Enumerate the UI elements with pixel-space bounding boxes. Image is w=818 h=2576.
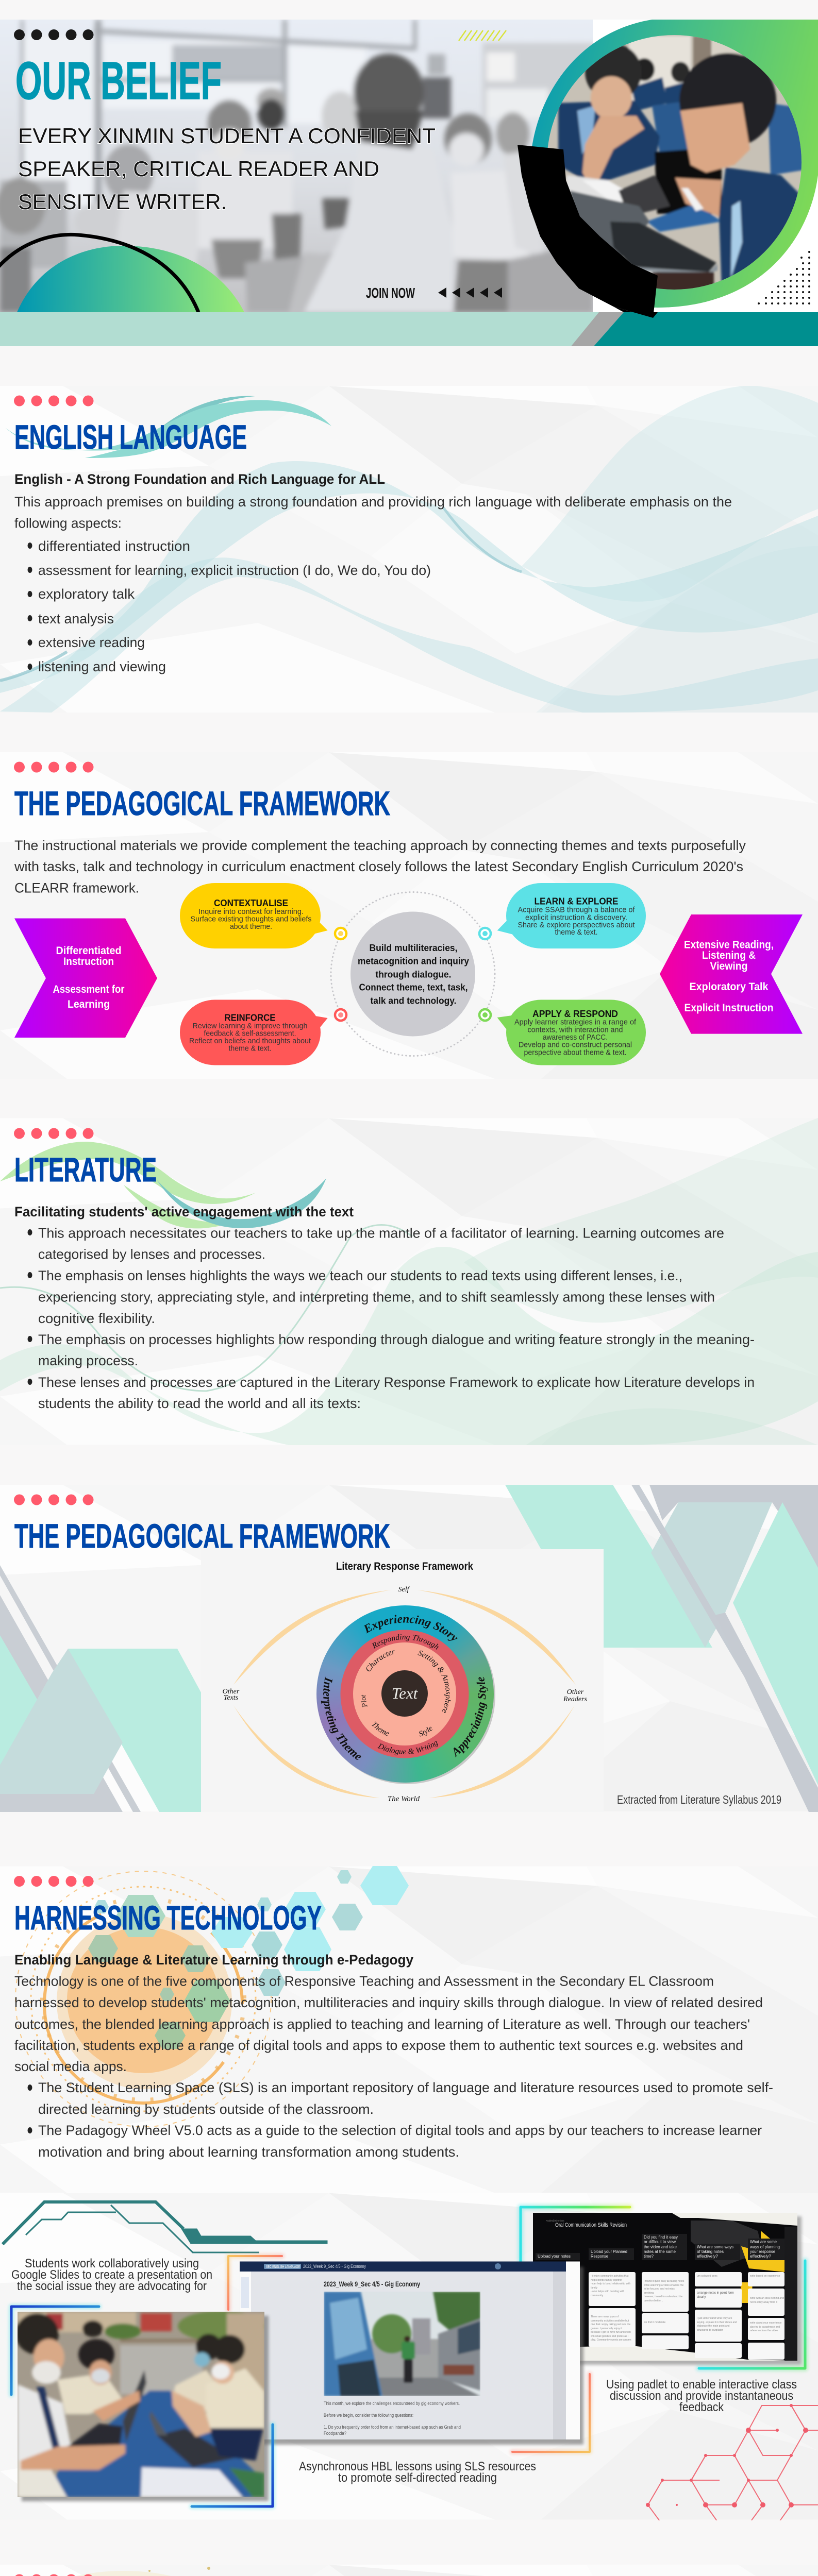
bubble: reinforce: REINFORCE [225,1012,275,1023]
left chevron [14,918,157,1038]
inner labels: Plot [361,1695,368,1707]
padlet column headers [536,2234,784,2260]
process ring [340,1630,469,1758]
belief statement: SPEAKER, CRITICAL READER AND [18,157,379,181]
caption: google slides: the social issue they are advocating for [17,2279,207,2293]
aspects bullet list: text analysis [38,611,114,626]
intro text: social media apps. [14,2059,127,2074]
padlet card text: also try to paraphrase and [750,2326,780,2329]
inner labels: Character [366,1650,395,1671]
bubble: apply and respond: contexts, with interaction and [528,1026,623,1034]
literature bullet list: categorised by lenses and processes. [38,1247,265,1262]
intro text: with tasks, talk and technology in curriculum enactment closely follows the latest Secondary English Curriculum 2020's [14,859,743,874]
green wave ribbons [0,1118,818,1445]
caption: sls [299,2460,536,2485]
padlet column headers: What are some [750,2240,777,2244]
teal swoosh [5,396,331,458]
screenshot: sls lesson [240,2262,583,2445]
padlet card text: There are many types of [591,2315,619,2318]
padlet card text [591,2275,784,2342]
literature bullet list: The emphasis on processes highlights how responding through dialogue and writing feature strongly in the meaning- [38,1332,755,1347]
padlet card text: um coloured pens [697,2275,717,2278]
technology bullet list [28,2080,773,2160]
padlet board title: Oral Communication Skills Revision [555,2222,627,2228]
padlet card text: write about your experience [750,2321,782,2325]
bubble: reinforce: feedback & self-assessment. [204,1029,296,1038]
aspects bullet list [28,538,431,674]
intro text [14,838,746,895]
inner labels: Theme [372,1721,389,1736]
padlet column headers: the video and take [644,2245,677,2249]
padlet card text: helps bonds family together [591,2279,622,2282]
intro text: outcomes, the blended learning approach is applied to teaching and learning of Literature as well. Through our teachers' [14,2016,750,2032]
literature bullet list: making process. [38,1353,138,1368]
caption: sls: Asynchronous HBL lessons using SLS resources [299,2460,536,2473]
panel background [0,1118,818,1445]
caption: google slides: Google Slides to create a presentation on [11,2268,212,2282]
inner labels [360,1647,453,1739]
red dots [14,1494,94,1505]
sls header text: 2023_Week 9_Sec 4/5 - Gig Economy [303,2264,366,2269]
bubble: contextualise [180,883,328,948]
bubble: apply and respond: Apply learner strategies in a range of [514,1019,637,1027]
padlet column headers: or difficult to view [644,2240,676,2244]
padlet card text: while watching a video enables me [644,2284,683,2287]
padlet card text: arrange notes in point form [697,2292,734,2295]
padlet column headers: of taking notes [697,2249,724,2254]
subheading: English - A Strong Foundation and Rich Language for ALL [14,471,385,487]
centre circle [350,912,475,1037]
eye labels: Other [223,1688,240,1696]
sls lesson text [324,2401,461,2436]
centre: text: Text [392,1684,419,1702]
bubble: learn and explore: LEARN & EXPLORE [534,896,619,906]
padlet card text: I found it quite easy as taking notes [644,2280,685,2283]
padlet card text: however, i need to understand the [644,2295,683,2298]
padlet card text: - also helps with bonding with [591,2290,625,2293]
neon frame: padlet [521,2207,805,2368]
photo: students collaborating [15,2311,269,2501]
panel: harnessing technology [0,1866,818,2524]
padlet card text: family [591,2286,598,2290]
caption: padlet: discussion and provide instantaneous [610,2389,793,2403]
hero black dots [14,29,94,40]
technology bullet list: motivation and bring about learning transformation among students. [38,2144,459,2160]
intro text: The instructional materials we provide complement the teaching approach by connecting themes and texts purposefully [14,838,746,853]
panel: literature [0,1118,818,1445]
white area behind ring [593,20,818,312]
process labels [372,1634,439,1755]
centre circle: talk and technology. [370,995,457,1006]
bubble: reinforce: theme & text. [229,1044,271,1053]
intro text: CLEARR framework. [14,880,139,895]
decorative hexagons [88,1866,409,2049]
left chevron: Learning [68,998,110,1010]
literature bullet list: These lenses and processes are captured in the Literary Response Framework to explicate how Literature develops in [38,1375,755,1390]
sls lesson text: 1. Do you frequently order food from an internet-based app such as Grab and [324,2425,461,2430]
right chevron: Extensive Reading, [684,939,774,951]
hero bottom band [0,307,818,346]
subheading: Facilitating students' active engagement with the text [14,1204,354,1219]
red dots [14,396,94,406]
bubble: apply and respond [497,999,646,1065]
padlet column headers: effectively? [697,2254,719,2259]
padlet column headers: Response [591,2254,609,2259]
padlet card text: - can help to bond relationship with [591,2282,630,2285]
neon frame: students photo [11,2307,273,2506]
bubble: contextualise: about theme. [230,923,272,931]
sls lesson photo [324,2292,480,2396]
lens labels: Appreciating Style [454,1676,489,1757]
lens labels: Interpreting Theme [321,1676,361,1760]
bubble: reinforce [180,999,328,1065]
padlet card text: structured to invigilator [697,2329,723,2332]
padlet column headers: effectively? [750,2254,772,2259]
literature bullet list: cognitive flexibility. [38,1311,155,1326]
literature bullet list: experiencing story, appreciating style, and interpreting theme, and to shift seamlessly among these lenses with [38,1290,715,1305]
panel background [0,752,818,1079]
intro text: Technology is one of the five components of Responsive Teaching and Assessment in the Secondary EL Classroom [14,1973,714,1989]
right chevron: Viewing [710,960,747,972]
panel: the pedagogical framework (literature) [0,1485,818,1812]
bubble: learn and explore: theme & text. [555,928,598,937]
intro text: following aspects: [14,515,122,531]
caption: padlet: feedback [679,2400,724,2414]
connector rings [335,928,491,1021]
padlet card text: community [591,2294,604,2297]
centre: text [381,1670,428,1717]
outer lens ring [316,1605,494,1783]
padlet card text: because i get to have fun and even [591,2331,631,2334]
bubble: learn and explore [497,883,646,948]
padlet card text: to be focused and not miss [644,2287,675,2291]
panel background [0,1866,818,2519]
eye labels: Self [398,1586,410,1594]
technology bullet list: directed learning by students outside of the classroom. [38,2102,374,2117]
diagram backing [201,1549,604,1812]
intro text [14,1973,763,2074]
red dots [14,2574,94,2576]
hero black swoosh [517,145,658,318]
panel: our belief hero [0,20,818,346]
panel: talent development [15,2567,210,2576]
intro text: This approach premises on building a strong foundation and providing rich language with deliberate emphasis on the [14,494,732,510]
panel background [0,1485,818,1811]
caption: google slides: Students work collaboratively using [25,2257,199,2270]
inner labels: Setting & Atmosphere [418,1651,451,1713]
diagram: literary response framework [223,1549,604,1803]
literature bullet list: This approach necessitates our teachers to take up the mantle of a facilitator of learning. Learning outcomes are [38,1226,724,1241]
eye outline [233,1590,576,1798]
bubble: learn and explore: Acquire SSAB through a balance of [517,906,635,914]
technology bullet list: The Student Learning Space (SLS) is an important repository of language and literature resources used to promote self- [38,2080,773,2095]
caption: padlet: Using padlet to enable interactive class [606,2378,797,2392]
left chevron: Assessment for [53,984,125,995]
padlet column headers: time? [644,2254,654,2259]
subheading: Enabling Language & Literature Learning through e-Pedagogy [14,1952,413,1968]
process labels: Dialogue & Writing [377,1741,438,1755]
left chevron: Instruction [63,956,114,968]
padlet card text: clearly [697,2296,706,2299]
sls lesson title: 2023_Week 9_Sec 4/5 - Gig Economy [324,2280,420,2288]
belief statement: EVERY XINMIN STUDENT A CONFIDENT [18,124,436,148]
padlet card text: anything. [644,2292,654,2295]
right chevron [660,914,803,1034]
padlet card text: write with an idea in mind and [750,2297,784,2300]
literature bullet list [28,1226,755,1411]
bubble: reinforce: Reflect on beliefs and thoughts about [189,1037,311,1045]
sls lesson text: Foodpanda? [324,2431,346,2436]
eye labels: The World [388,1795,420,1803]
literature bullet list: The emphasis on lenses highlights the ways we teach our students to read texts using different lenses, i.e., [38,1268,682,1283]
hero circular student photo [544,31,807,294]
decorative orange radial rings [15,1871,271,2127]
padlet column headers: your response [750,2249,776,2254]
salmon ring [353,1642,456,1745]
sls header text: SEC ENGLISH LANGUAGE [266,2265,300,2269]
padlet card text: we find it moderate [644,2321,665,2324]
padlet column headers: Upload your notes [538,2254,571,2259]
bubble: reinforce: Review learning & improve through [193,1022,307,1030]
teal circuit lines [3,2202,327,2252]
eye labels [223,1586,587,1803]
padlet card text: saying, explain it in their shoes and [697,2321,737,2324]
aspects bullet list: exploratory talk [38,586,135,602]
padlet column headers: notes at the same [644,2249,676,2254]
panel background [0,386,818,713]
panel: the pedagogical framework (english) [0,752,818,1079]
green and teal swoosh [0,1142,326,1228]
eye labels: Readers [563,1696,587,1703]
right chevron: Listening & [702,950,756,961]
padlet card text: question better .. [644,2299,663,2302]
process labels: Responding Through [372,1634,439,1650]
aspects bullet list: differentiated instruction [38,538,190,554]
sls lesson text: This month, we explore the challenges encountered by gig economy workers. [324,2401,460,2406]
padlet card text: not to stray away from it [750,2301,778,2304]
bubble: contextualise: Inquire into context for learning. [198,908,304,916]
padlet card text: reference from the video [750,2329,778,2332]
caption: padlet [606,2378,797,2414]
padlet card text: elaborate the main point and [697,2325,730,2328]
sls lesson text: Before we begin, consider the following questions: [324,2413,413,2418]
wave ribbons [0,386,818,713]
caption: sls: to promote self-directed reading [338,2471,497,2485]
bubble: apply and respond: Develop and co-construct personal [519,1041,632,1049]
belief statement: SENSITIVE WRITER. [18,190,227,214]
hero dot triangle [758,251,810,304]
padlet card text: I just understand what they are [697,2317,732,2320]
hero green ring [532,20,818,308]
red dots [14,1128,94,1139]
centre circle: Connect theme, text, task, [359,982,468,993]
technology bullet list: The Padagogy Wheel V5.0 acts as a guide to the selection of digital tools and apps by our teachers to increase learner [38,2123,762,2138]
padlet cards [589,2272,784,2360]
bubble: contextualise: Surface existing thoughts and beliefs [191,916,311,924]
bubble: contextualise: CONTEXTUALISE [214,898,288,908]
gold splatter and marble [77,2567,210,2576]
padlet column headers: Did you find it easy [644,2235,678,2240]
padlet column headers: Upload your Planned [591,2249,627,2254]
hero green dome [17,246,244,312]
padlet card text: one that i enjoy taking part in is the [591,2323,630,2326]
panel background [0,2565,818,2576]
padlet card text: games. I personally enjoy it [591,2327,622,2330]
screenshot: padlet board: Padlet@Xinminss [546,2219,564,2222]
hero classroom photo backdrop [0,20,593,312]
padlet card text: play. Community events are a norm [591,2338,631,2342]
eye labels: Other [567,1688,584,1696]
lens labels: Experiencing Story [364,1615,458,1641]
padlet card text: win small goodies and prizes as i [591,2335,628,2338]
screenshot: padlet board [533,2213,802,2365]
heading: literature: LITERATURE [14,1150,157,1189]
icon: left arrows [438,287,502,298]
inner labels: Style [419,1727,432,1736]
heading: our belief: OUR BELIEF [15,51,222,110]
red dots [14,761,94,773]
heading: harnessing technology: HARNESSING TECHNOLOGY [14,1899,322,1937]
bubble: apply and respond: awareness of PACC. [543,1033,608,1042]
hero black arc [0,234,198,312]
bubble: apply and respond: perspective about theme & text. [524,1048,627,1057]
padlet card text: community activities available but [591,2319,629,2323]
diagram title: Literary Response Framework [336,1561,473,1572]
dotted ring [331,892,495,1056]
bubble: apply and respond: APPLY & RESPOND [532,1009,618,1019]
neon frame: sls [228,2256,590,2452]
literature bullet list: students the ability to read the world and all its texts: [38,1396,361,1411]
aspects bullet list: assessment for learning, explicit instruction (I do, We do, You do) [38,563,431,578]
aspects bullet list: listening and viewing [38,659,166,674]
centre circle: through dialogue. [375,969,452,979]
intro text: harnessed to develop students' metacognition, multiliteracies and inquiry skills through dialogue. In view of related desired [14,1995,763,2010]
lens labels [321,1615,489,1760]
right chevron: Explicit Instruction [685,1002,773,1014]
red hexagon network [646,2404,818,2524]
right chevron: Exploratory Talk [690,981,769,993]
padlet column headers: ways of planning [749,2245,780,2249]
join now label: JOIN NOW [366,285,415,301]
yellow slashes [459,30,506,41]
heading: english language: ENGLISH LANGUAGE [14,418,247,456]
left chevron: Differentiated [56,945,122,957]
panel: english language [0,386,818,713]
eye labels: Texts [224,1694,239,1702]
padlet column headers: What are some ways [697,2245,733,2249]
centre circle: Build multiliteracies, [369,943,458,953]
heading: THE PEDAGOGICAL FRAMEWORK [14,1517,390,1555]
intro text: facilitation, students explore a range of digital tools and apps to expose them to authentic text sources e.g. websites and [14,2038,743,2053]
red dots [14,1876,94,1887]
sls header text [266,2264,366,2269]
centre circle: metacognition and inquiry [358,956,469,967]
belief statement [18,124,436,214]
intro text [14,494,732,531]
aspects bullet list: extensive reading [38,635,145,650]
padlet card text: - i enjoy community activities that [591,2275,629,2278]
geometric teal and grey shapes [0,1485,818,1812]
heading: THE PEDAGOGICAL FRAMEWORK [14,784,390,822]
bubble: learn and explore: explicit instruction & discovery. [525,913,627,922]
padlet card text: write based on experience [750,2275,780,2278]
bubble: learn and explore: Share & explore perspectives about [517,921,635,929]
caption: google slides [11,2257,212,2293]
circle shadow [318,1607,495,1784]
